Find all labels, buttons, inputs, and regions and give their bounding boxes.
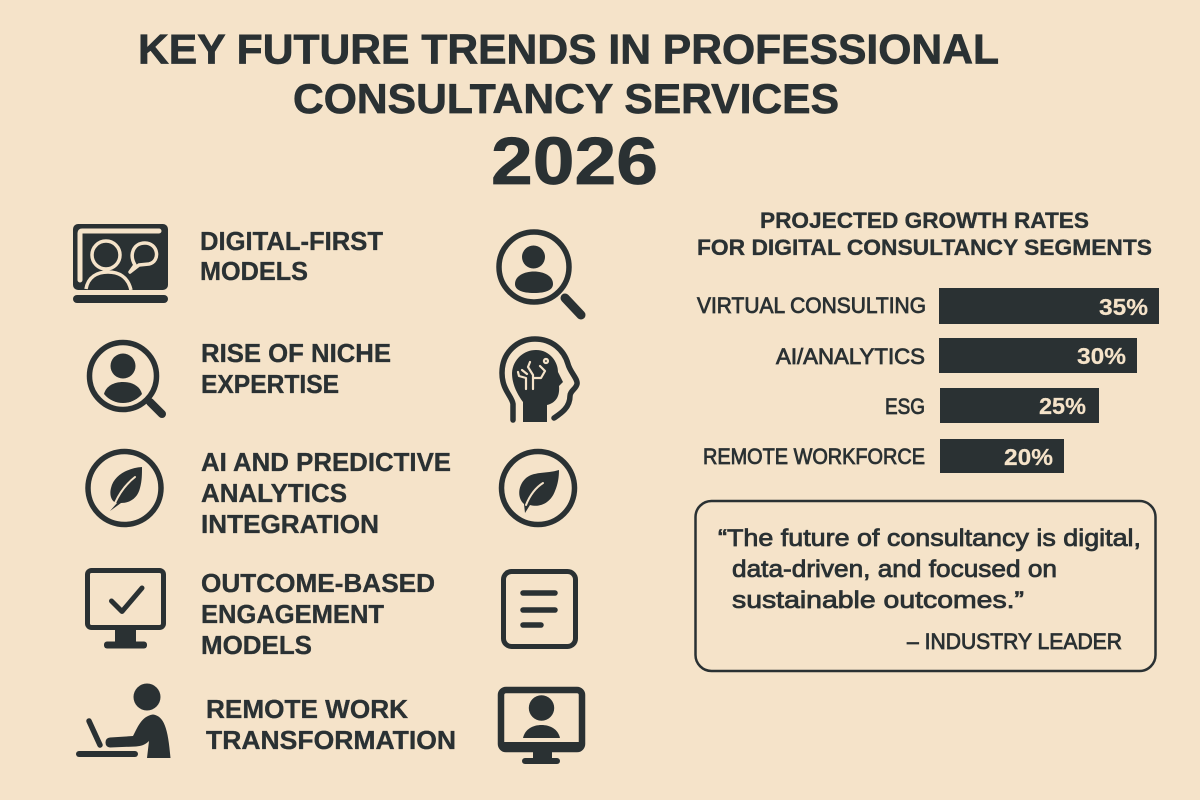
chart heading: PROJECTED GROWTH RATES: [760, 208, 1089, 233]
label: rise of niche expertise: EXPERTISE: [201, 369, 339, 399]
bar: ai/analytics: 30%: [1077, 343, 1126, 369]
label: remote work transformation: [206, 694, 456, 755]
label: outcome-based engagement models: ENGAGEMENT: [201, 599, 384, 629]
bar: ai/analytics: AI/ANALYTICS: [776, 344, 925, 369]
chart heading: FOR DIGITAL CONSULTANCY SEGMENTS: [697, 235, 1152, 260]
callout: quote: – INDUSTRY LEADER: [907, 629, 1122, 654]
callout: quote: data-driven, and focused on: [732, 556, 1057, 583]
label: ai and predictive analytics integration: AI AND PREDICTIVE: [201, 447, 451, 477]
title: CONSULTANCY SERVICES: [293, 75, 839, 122]
bar: esg: [885, 388, 1099, 423]
callout: quote: [696, 501, 1156, 671]
label: ai and predictive analytics integration: [201, 447, 451, 539]
icon: person at laptop: [76, 684, 170, 758]
icon: document list: [504, 572, 576, 646]
icon: video call laptop: [73, 224, 168, 303]
icon: monitor with check: [88, 570, 164, 648]
label: rise of niche expertise: RISE OF NICHE: [201, 338, 391, 368]
title: KEY FUTURE TRENDS IN PROFESSIONAL: [138, 26, 999, 72]
label: digital-first models: MODELS: [200, 256, 308, 286]
label: rise of niche expertise: [201, 338, 391, 399]
bar: esg: 25%: [1039, 393, 1086, 419]
bar: virtual consulting: 35%: [1099, 294, 1148, 320]
label: ai and predictive analytics integration: INTEGRATION: [201, 509, 379, 539]
label: outcome-based engagement models: [201, 568, 435, 660]
label: remote work transformation: TRANSFORMATION: [206, 725, 456, 755]
label: digital-first models: [200, 226, 383, 286]
title: 2026: [491, 124, 658, 199]
bar chart: [697, 288, 1159, 473]
label: digital-first models: DIGITAL-FIRST: [200, 226, 383, 256]
bar: remote workforce: REMOTE WORKFORCE: [703, 444, 925, 469]
icon: monitor with person: [501, 690, 582, 764]
label: ai and predictive analytics integration: ANALYTICS: [201, 478, 347, 508]
label: outcome-based engagement models: OUTCOME-BASED: [201, 568, 435, 598]
icon: magnifier with person, right: [499, 232, 581, 315]
bar: remote workforce: [703, 439, 1064, 473]
bar: esg: ESG: [885, 394, 925, 419]
bar: ai/analytics: [776, 338, 1137, 373]
callout: quote: sustainable outcomes.”: [732, 587, 1024, 614]
icon: head with circuit brain: [502, 339, 577, 422]
icon: leaf in circle, left: [88, 452, 161, 524]
bar: virtual consulting: [697, 288, 1159, 324]
callout: quote: “The future of consultancy is digital,: [718, 525, 1141, 552]
bar: remote workforce: 20%: [1004, 444, 1053, 470]
chart heading: [697, 208, 1152, 260]
label: remote work transformation: REMOTE WORK: [206, 694, 408, 724]
icon: leaf in circle, right: [502, 452, 574, 524]
icon: magnifier with person, left: [90, 342, 162, 414]
title: [138, 26, 999, 199]
label: outcome-based engagement models: MODELS: [201, 630, 312, 660]
bar: virtual consulting: VIRTUAL CONSULTING: [697, 293, 926, 318]
